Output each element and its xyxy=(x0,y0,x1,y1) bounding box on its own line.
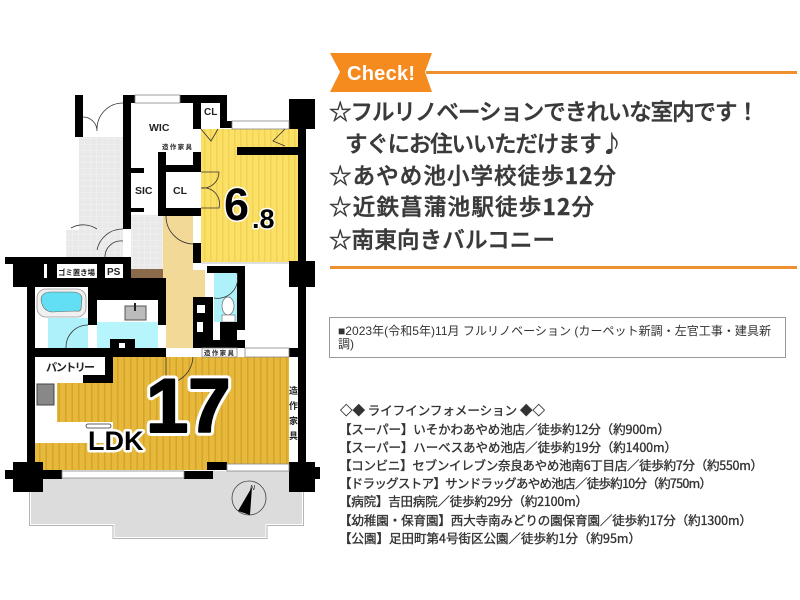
pantry label xyxy=(35,357,105,375)
renovation note: ■2023年(令和5年)11月 フルリノベーション (カーペット新調・左官工事・建具新 xyxy=(338,323,771,338)
area number: LDK 17: 17 xyxy=(146,364,231,449)
headline list: ☆近鉄菖蒲池駅徒歩12分 xyxy=(329,190,594,222)
life information: 【スーパー】ハーベスあやめ池店／徒歩約19分（約1400m） xyxy=(339,437,677,456)
pantry label: パントリー xyxy=(46,361,95,374)
compass: N xyxy=(250,485,256,492)
divider bottom xyxy=(330,266,797,269)
life information xyxy=(339,400,763,547)
life information: 【幼稚園・保育園】西大寺南みどりの園保育園／徒歩約17分（約1300m） xyxy=(339,510,752,529)
label: WIC: WIC xyxy=(149,122,170,134)
label: built-in furniture mid: 造作家具 xyxy=(204,348,234,357)
label: PS: PS xyxy=(107,267,121,278)
headline list: ☆フルリノベーションできれいな室内です！ xyxy=(329,95,759,127)
wall openings xyxy=(119,305,245,348)
LDK floor xyxy=(35,357,289,470)
walls xyxy=(5,95,320,492)
label: LDK: LDK xyxy=(88,426,144,456)
label: garbage area: ゴミ置き場 xyxy=(58,267,96,277)
entry step xyxy=(131,269,163,278)
label: built-in furniture vertical: 具 xyxy=(289,431,298,441)
bedroom floor xyxy=(201,129,298,262)
area number: LDK 17: 17 xyxy=(146,364,231,449)
renovation note: 調) xyxy=(338,337,354,351)
label: built-in furniture top: 造作家具 xyxy=(162,142,192,151)
divider top xyxy=(426,71,797,74)
entry hall tile xyxy=(131,215,163,270)
label: CL top: CL xyxy=(204,107,217,118)
headline list xyxy=(329,95,759,255)
toilet room xyxy=(214,273,237,323)
label: built-in furniture vertical: 造 xyxy=(289,386,298,396)
check ribbon xyxy=(330,53,432,92)
corridor xyxy=(163,216,205,348)
life information: ◇◆ ライフインフォメーション ◆◇ xyxy=(340,400,545,419)
compass xyxy=(232,481,266,515)
life information: 【ドラッグストア】サンドラッグあやめ池店／徒歩約10分（約750m） xyxy=(339,473,712,492)
faucet mark xyxy=(86,424,111,428)
headline list: ☆南東向きバルコニー xyxy=(329,223,555,255)
label: built-in furniture vertical: 作 xyxy=(289,400,298,411)
label: built-in furniture vertical xyxy=(289,386,298,441)
label: SIC: SIC xyxy=(135,185,153,197)
label: garbage area xyxy=(57,264,97,278)
headline list: すぐにお住いいただけます♪ xyxy=(345,127,623,159)
balcony xyxy=(30,471,304,538)
label: built-in furniture vertical: 家 xyxy=(289,415,298,426)
area decimal: .8: .8 xyxy=(252,204,275,234)
life information: 【スーパー】いそかわあやめ池店／徒歩約12分（約900m） xyxy=(339,419,670,438)
area number: bedroom 6.8: 6 xyxy=(224,179,249,230)
floor plan xyxy=(5,95,320,538)
window frames xyxy=(62,95,289,478)
life information: 【公園】足田町第4号街区公園／徒歩約1分（約95m） xyxy=(339,528,641,547)
label: PS xyxy=(105,264,123,278)
check ribbon: Check! xyxy=(347,63,415,85)
headline list: ☆あやめ池小学校徒歩12分 xyxy=(329,159,616,191)
bath xyxy=(35,287,88,348)
washroom xyxy=(97,300,158,348)
life information: 【コンビニ】セブンイレブン奈良あやめ池南6丁目店／徒歩約7分（約550m） xyxy=(339,455,763,474)
renovation note xyxy=(330,318,786,358)
label: CL middle: CL xyxy=(173,185,188,197)
entrance porch xyxy=(66,137,123,257)
door swings xyxy=(66,103,289,382)
stove xyxy=(37,384,54,405)
life information: 【病院】吉田病院／徒歩約29分（約2100m） xyxy=(339,491,588,510)
